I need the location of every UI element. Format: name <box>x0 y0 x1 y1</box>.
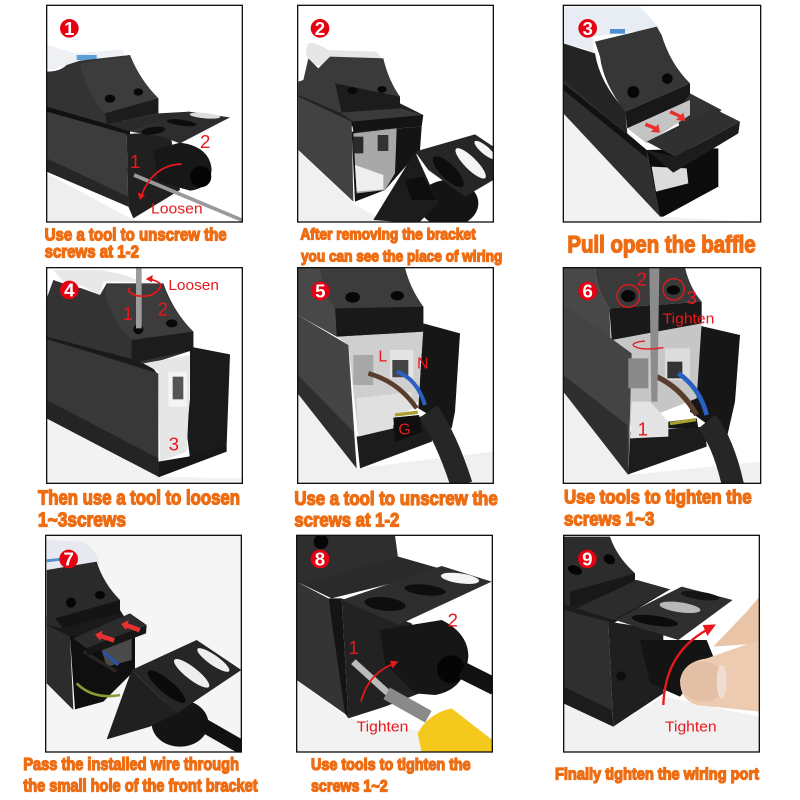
step number 1: 1 <box>64 18 75 39</box>
step number 6 <box>578 281 597 302</box>
caption: step 6 <box>564 488 752 531</box>
step number 4 <box>60 280 79 301</box>
red arrows <box>645 110 685 133</box>
frame <box>298 268 493 483</box>
caption: step 9: Finally tighten the wiring port <box>555 764 759 783</box>
panel: step 9 <box>555 535 759 783</box>
frame <box>563 268 761 483</box>
step number 5 <box>311 281 330 302</box>
wires: brown, blue, yellow-green <box>657 373 707 424</box>
frame <box>46 535 241 752</box>
caption: step 5: screws at 1-2 <box>294 511 399 532</box>
caption: step 8: Use tools to tighten the <box>311 755 471 774</box>
caption: step 4: Then use a tool to loosen <box>38 487 240 509</box>
photo: step 6 tightening screws <box>563 268 761 487</box>
red tighten arrow <box>663 624 716 705</box>
step number 8 <box>311 549 329 570</box>
frame <box>47 5 242 222</box>
photo: step 5 wiring L N G <box>298 268 493 485</box>
callouts: screws and tighten: 3 <box>687 287 697 308</box>
frame <box>564 535 759 752</box>
callouts: screws and loosen: 2 <box>200 131 210 152</box>
screwdriver <box>649 268 659 402</box>
panel: step 4 <box>38 268 242 532</box>
frame <box>47 268 242 483</box>
panel: step 2 <box>298 5 502 266</box>
caption: step 8 <box>311 755 471 796</box>
callouts: screws and loosen: 1 <box>130 151 140 172</box>
panel: step 6 <box>563 268 761 531</box>
callouts: loosen and screws: 1 <box>123 303 133 324</box>
caption: step 2: After removing the bracket <box>300 226 476 243</box>
photo: step 2 open housing and removed bracket <box>298 43 498 227</box>
caption: step 3: Pull open the baffle <box>567 231 756 258</box>
callouts: screws and tighten: 2 <box>448 609 458 630</box>
panel: step 5 <box>294 268 498 532</box>
caption: step 2 <box>300 226 502 266</box>
panel: step 8 <box>297 534 495 796</box>
step number 9: 9 <box>582 549 593 570</box>
red marks <box>617 279 684 349</box>
caption: step 1 <box>45 225 227 261</box>
callout: tighten: Tighten <box>665 720 717 736</box>
step number 7 <box>59 549 78 570</box>
panel: step 1 <box>45 5 243 261</box>
red rotation arrow <box>128 275 161 296</box>
step number 2: 2 <box>315 18 325 39</box>
callouts: screws and tighten: 1 <box>348 637 359 658</box>
screwdriver <box>353 662 428 717</box>
caption: step 5 <box>294 489 498 532</box>
caption: step 7 <box>23 754 258 796</box>
step number 8: 8 <box>315 549 325 570</box>
red loosen arrow <box>138 164 182 200</box>
callouts: loosen and screws: 2 <box>158 299 168 320</box>
step number 1 <box>60 18 79 39</box>
cable <box>707 422 733 487</box>
wires <box>77 652 120 696</box>
photo: step 7 wire through bracket <box>46 535 247 752</box>
caption: step 6: Use tools to tighten the <box>564 488 752 509</box>
callouts: screws and tighten: 1 <box>638 419 648 440</box>
photo: step 3 baffle pulled open <box>563 7 761 222</box>
callouts: screws and tighten: 2 <box>637 269 647 290</box>
caption: step 8: screws 1~2 <box>311 777 388 796</box>
callouts: loosen and screws <box>123 278 219 455</box>
panel: step 3 <box>563 5 761 258</box>
cable <box>428 412 462 485</box>
step number 7: 7 <box>63 549 74 570</box>
photo: step 8 tightening bracket screw <box>297 534 495 752</box>
frame <box>297 535 492 752</box>
photo: step 1 housing with bracket and screwdriver <box>47 45 243 222</box>
yellow handle <box>418 708 492 752</box>
callouts: L N G: N <box>417 355 429 372</box>
step number 4: 4 <box>64 280 75 301</box>
callouts: L N G: L <box>378 349 387 366</box>
photo: step 4 housing with screwdriver in top screw <box>47 268 242 483</box>
frame <box>563 5 761 222</box>
wires: brown, blue, yellow-green <box>368 372 425 415</box>
step number 3: 3 <box>582 18 593 39</box>
step number 9 <box>578 549 597 570</box>
panel: step 7 <box>23 535 258 796</box>
callouts: L N G: G <box>398 421 411 438</box>
callouts: loosen and screws: Loosen <box>168 278 219 294</box>
frame <box>298 5 493 222</box>
red arrows <box>95 620 141 643</box>
callouts: screws and tighten: Tighten <box>663 311 714 327</box>
fingers <box>680 597 759 712</box>
step number 6: 6 <box>582 281 593 302</box>
step number 3 <box>578 18 597 39</box>
callouts: loosen and screws: 3 <box>169 434 179 455</box>
callouts: screws and tighten <box>637 269 714 440</box>
callouts: screws and tighten <box>348 609 458 736</box>
caption: step 4: 1~3screws <box>38 510 126 532</box>
callouts: screws and tighten: Tighten <box>357 720 408 736</box>
caption: step 4 <box>38 487 240 532</box>
photo: step 9 hand tightening wiring port <box>564 537 759 752</box>
caption: step 7: the small hole of the front bracket <box>23 776 258 796</box>
caption: step 2: you can see the place of wiring <box>301 249 502 266</box>
caption: step 1: screws at 1-2 <box>45 241 139 261</box>
callouts: screws and loosen: Loosen <box>151 201 203 217</box>
step number 5: 5 <box>315 281 326 302</box>
caption: step 5: Use a tool to unscrew the <box>294 489 498 510</box>
red tighten arrow <box>361 661 398 702</box>
callouts: L N G <box>378 349 429 438</box>
step number 2 <box>311 18 329 39</box>
callouts: screws and loosen <box>130 131 210 217</box>
caption: step 7: Pass the installed wire through <box>23 754 239 774</box>
caption: step 6: screws 1~3 <box>564 510 655 531</box>
caption: step 1: Use a tool to unscrew the <box>45 225 227 245</box>
